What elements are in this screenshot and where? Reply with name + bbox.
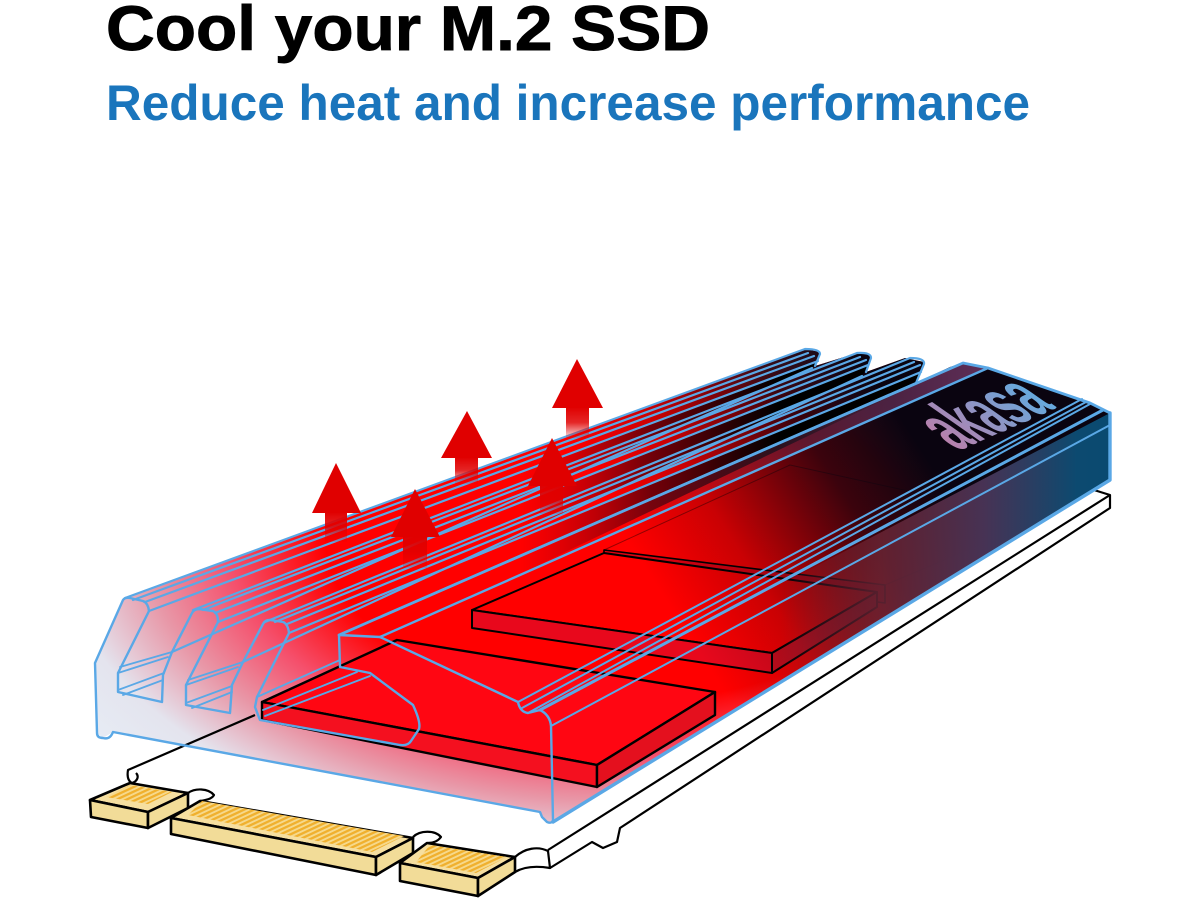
SSD circuit board outline (128, 490, 1110, 872)
brand label: akasa: akasa (892, 361, 1073, 462)
top plate edges (339, 363, 1110, 635)
fin foot details (118, 652, 370, 716)
top plate side strip tint (666, 364, 984, 508)
heatsink front profile (95, 598, 553, 823)
dark cool end shading (579, 350, 1108, 701)
heat arrow 1 (312, 463, 361, 542)
heat arrow 5 (552, 359, 603, 438)
heat arrow 2 (391, 489, 440, 568)
fin gap shadows (532, 364, 918, 567)
heatsink colour body with transparent SSD chips (80, 340, 1120, 830)
heatsink blue line drawing (95, 349, 1110, 823)
heat gradient fill (96, 350, 952, 822)
fin three long edges (265, 358, 924, 635)
end and bottom edge (553, 413, 1110, 822)
heat arrow 4 (528, 438, 577, 514)
gold connector: right (400, 843, 515, 896)
side wall cool tint (788, 414, 1108, 672)
gold connector: centre (171, 801, 413, 875)
NAND chip middle (472, 553, 877, 673)
fin two long edges (193, 353, 871, 662)
NAND chip front (262, 640, 715, 787)
subtitle: Reduce heat and increase performance (106, 75, 1030, 131)
fin one long edges (125, 349, 820, 652)
gold connector: left (90, 783, 188, 828)
NAND chip rear (603, 464, 904, 604)
right rim edges (518, 399, 1090, 713)
heat arrow 3 (441, 411, 492, 484)
